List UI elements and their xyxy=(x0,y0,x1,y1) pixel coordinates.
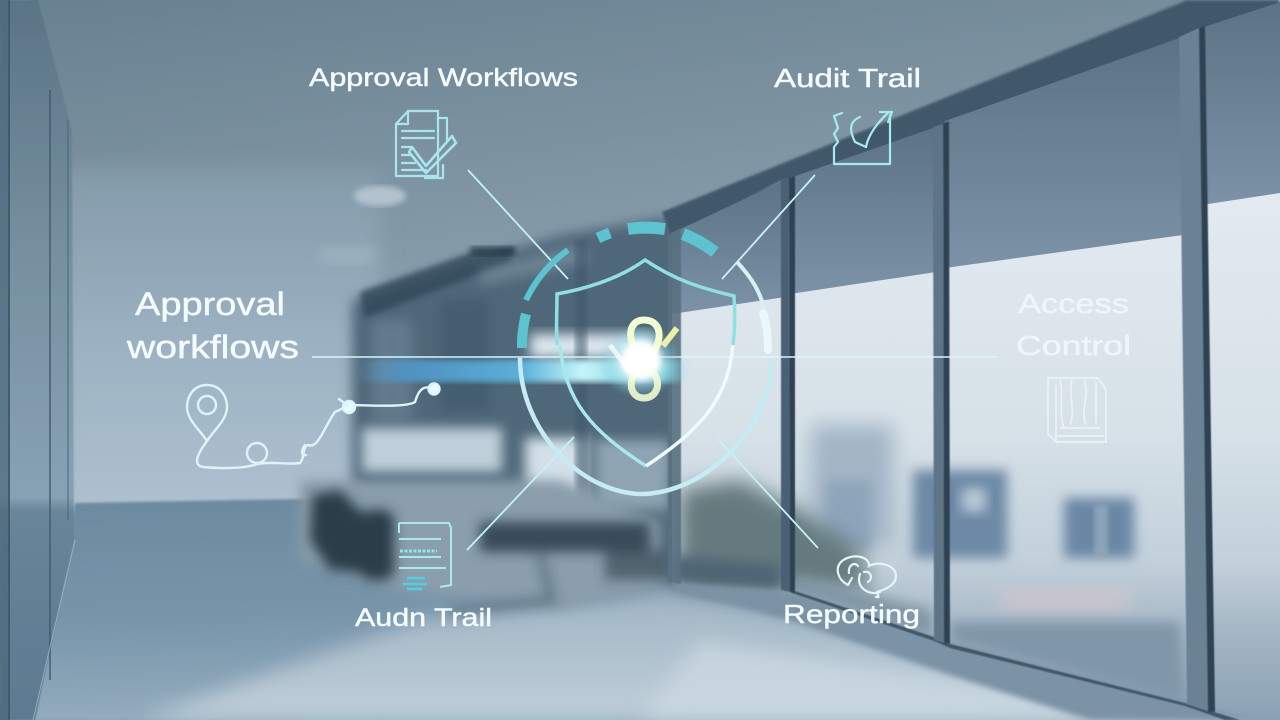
icon: audit trail chart xyxy=(834,112,892,164)
icon: route path with pin xyxy=(187,384,440,468)
icon: access control layered document xyxy=(1048,378,1106,442)
dashed arc xyxy=(522,228,715,348)
ceiling xyxy=(30,0,1187,300)
ceiling light panels xyxy=(354,186,406,206)
connector lines xyxy=(467,170,818,550)
blinds xyxy=(672,180,785,314)
heading: Access Control right: Control xyxy=(1016,330,1131,361)
heading: Approval Workflows top: Approval Workflows xyxy=(309,64,578,92)
icon: reporting swirl xyxy=(838,556,896,597)
horizontal light beam xyxy=(312,326,998,398)
room bright windows xyxy=(362,428,502,472)
shield emblem xyxy=(520,228,772,494)
heading: Access Control right: Access xyxy=(1018,288,1129,319)
heading: Audit Trail top: Audit Trail xyxy=(774,63,921,93)
city skyline xyxy=(672,425,1185,702)
centre dark room xyxy=(352,215,680,585)
window panes, lower bright part xyxy=(672,0,1280,720)
sill xyxy=(672,583,1252,720)
heading: Access Control right xyxy=(1016,288,1131,361)
heading: Approval workflows left xyxy=(126,286,299,365)
window mullions xyxy=(668,26,1215,712)
icon: audit trail terminal list xyxy=(399,523,451,589)
icon: document with check xyxy=(396,111,456,178)
outer ring lower xyxy=(737,262,764,308)
dark header band xyxy=(662,0,1280,239)
back wall xyxy=(60,170,380,530)
heading: Approval workflows left: workflows xyxy=(126,329,299,365)
left wall xyxy=(0,0,74,720)
table and chairs xyxy=(300,480,660,610)
heading: Audit Trail bottom: Audn Trail xyxy=(355,604,492,632)
floor xyxy=(35,498,1252,720)
heading: Approval workflows left: Approval xyxy=(135,286,285,322)
heading: Reporting: Reporting xyxy=(783,599,920,629)
check and lock xyxy=(631,320,659,362)
shield outline xyxy=(557,260,735,345)
